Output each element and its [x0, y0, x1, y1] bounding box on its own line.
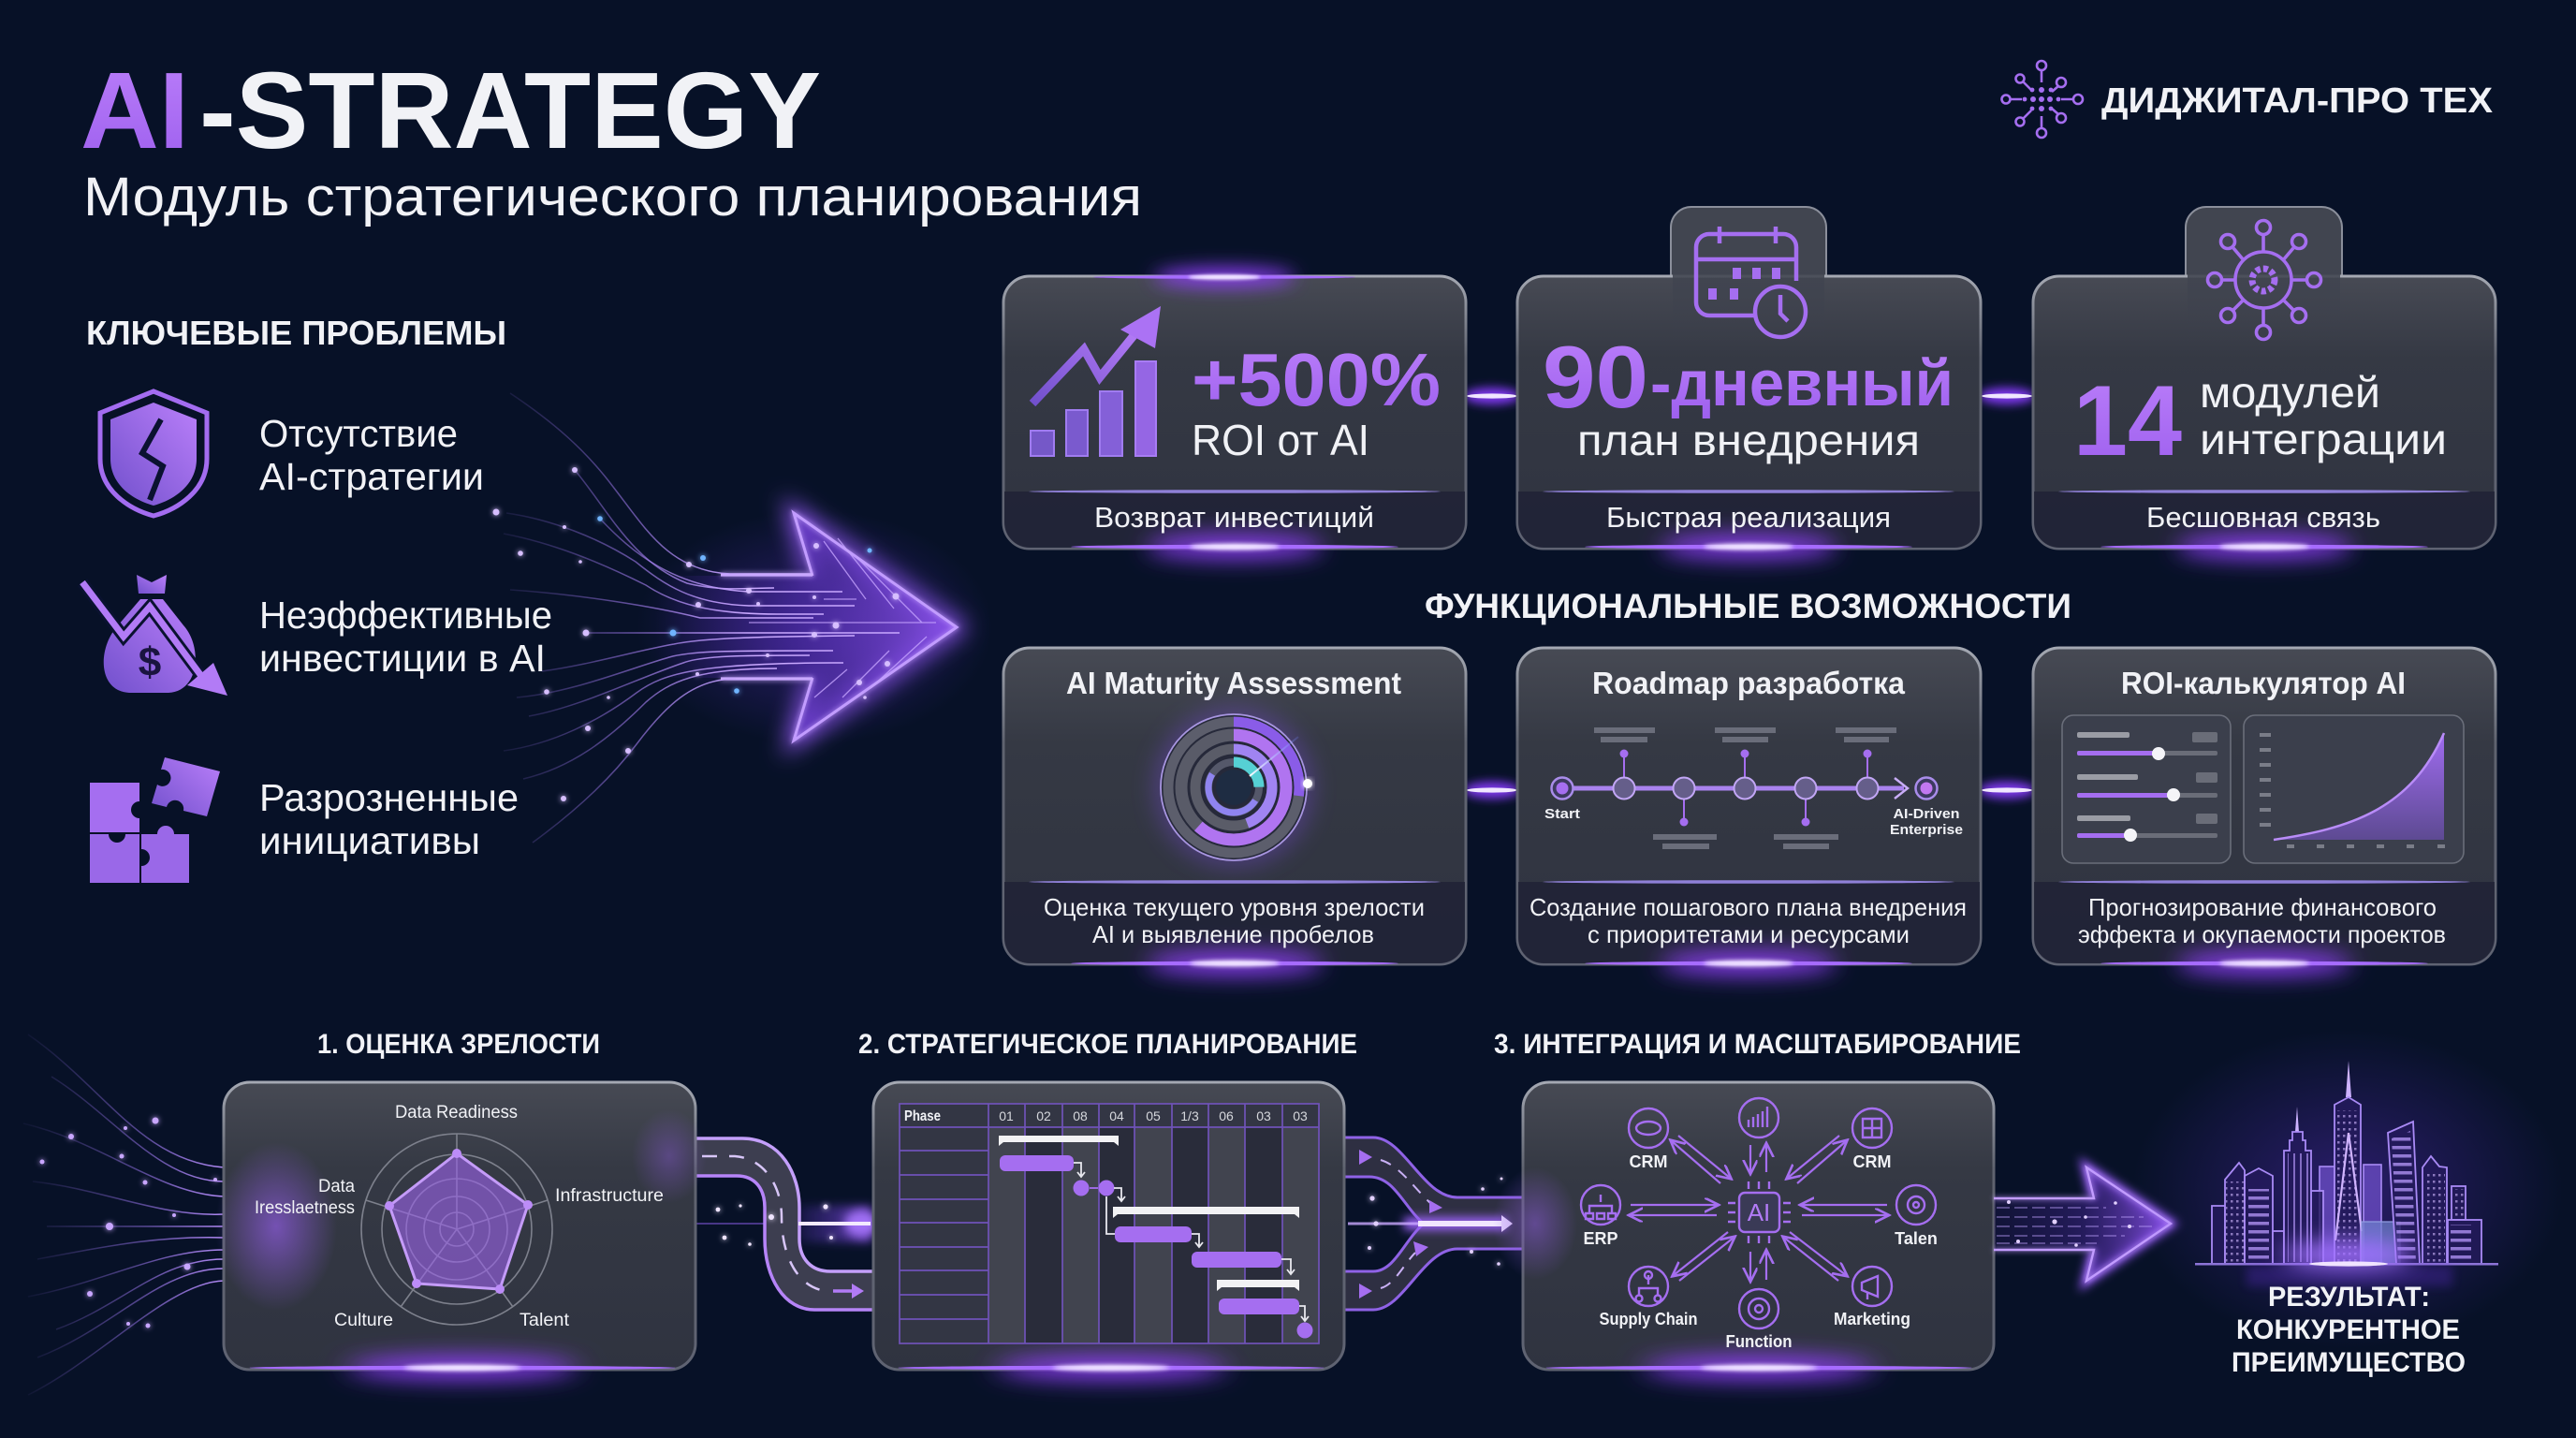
panel: AI Maturity Assessment: [1003, 648, 1466, 976]
labels: systems: CRM: [1629, 1152, 1668, 1171]
footer caption: Возврат инвестиций: [1094, 501, 1374, 534]
connector: second row: [1464, 782, 2035, 799]
icon: network gear: [2207, 221, 2321, 339]
text: problem 3: [259, 776, 519, 862]
chart: Gantt table: 05: [1146, 1108, 1161, 1123]
icon: money bag with down arrow: $: [139, 639, 161, 685]
title: -STRATEGY: [199, 50, 821, 171]
chart: Gantt table: 01: [999, 1108, 1014, 1123]
chart: roadmap timeline: [1544, 727, 1963, 849]
text: problem 2: Неэффективные: [259, 594, 552, 637]
icon: AI chip: [1728, 1181, 1791, 1243]
arrow: to result: [1994, 1167, 2171, 1281]
chart: radar: Iresslaetness: [255, 1198, 355, 1218]
icon: growth chart: [1031, 306, 1161, 456]
text: problem 2: [259, 594, 552, 680]
labels: systems: ERP: [1583, 1229, 1618, 1248]
card description: эффекта и окупаемости проектов: [2078, 920, 2446, 948]
chart: radar: Talent: [520, 1311, 570, 1330]
chart: radar: Data: [318, 1177, 355, 1196]
chart: AI integration hub: [1581, 1098, 1938, 1351]
card description: AI и выявление пробелов: [1092, 920, 1374, 948]
panel: ROI calculator: [2033, 648, 2496, 976]
card description: Создание пошагового плана внедрения: [1530, 893, 1967, 921]
widget: sliders panel: [2062, 715, 2231, 863]
heading: key problems: КЛЮЧЕВЫЕ ПРОБЛЕМЫ: [86, 314, 506, 352]
title: AI: [80, 50, 189, 171]
labels: systems: Talen: [1895, 1229, 1938, 1248]
card title: AI Maturity Assessment: [1066, 666, 1401, 700]
labels: systems: [1583, 1152, 1938, 1351]
metric label: интеграции: [2200, 415, 2447, 463]
panel: key problems: [82, 314, 552, 883]
text: result: ПРЕИМУЩЕСТВО: [2232, 1347, 2466, 1378]
footer caption: Быстрая реализация: [1606, 501, 1891, 534]
text: problem 2: инвестиции в AI: [259, 637, 546, 680]
chart: radar: Data Readiness: [395, 1103, 518, 1123]
chart: roadmap timeline: Enterprise: [1890, 822, 1963, 838]
step heading: 1. ОЦЕНКА ЗРЕЛОСТИ: [317, 1029, 600, 1060]
metric label: [2200, 368, 2447, 463]
panel: 14 modules card: [2033, 207, 2496, 559]
text: problem 1: AI-стратегии: [259, 455, 484, 498]
card description: [1530, 893, 1967, 948]
panel: ROI metric card: [1003, 268, 1466, 559]
text: problem 1: Отсутствие: [259, 412, 458, 455]
card title: Roadmap разработка: [1592, 666, 1906, 700]
panel: step 3 integration: [1493, 1029, 2021, 1380]
labels: systems: CRM: [1853, 1152, 1891, 1171]
chart: Gantt table: [900, 1104, 1319, 1343]
panel: step 2 Gantt: [858, 1029, 1357, 1380]
metric: +500%: +500%: [1192, 338, 1441, 421]
subtitle: Модуль стратегического планирования: [83, 167, 1142, 227]
arrow: big flow arrow into metrics: [492, 393, 992, 843]
card description: Оценка текущего уровня зрелости: [1044, 893, 1425, 921]
metric: 90-дневный: 90: [1543, 328, 1648, 426]
connector: top row: [1464, 388, 2035, 404]
panel: Roadmap: [1517, 648, 1981, 976]
chart: Gantt table: 03: [1293, 1108, 1308, 1123]
labels: systems: Marketing: [1834, 1310, 1910, 1328]
text: result: [2232, 1282, 2466, 1378]
chart: ROI curve: [2244, 715, 2464, 863]
chart: roadmap timeline: AI-Driven: [1893, 806, 1960, 822]
metric: 90-дневный: -дневный: [1650, 346, 1954, 419]
chart: Gantt table: 03: [1256, 1108, 1271, 1123]
card description: [2078, 893, 2446, 948]
step heading: 3. ИНТЕГРАЦИЯ И МАСШТАБИРОВАНИЕ: [1494, 1029, 2021, 1060]
logo text: ДИДЖИТАЛ-ПРО ТЕХ: [2101, 81, 2494, 121]
metric label: ROI от AI: [1192, 416, 1369, 464]
chart: Gantt table: 08: [1073, 1108, 1088, 1123]
connector: step 1 to step 2: [695, 1138, 878, 1310]
labels: systems: Function: [1726, 1332, 1792, 1351]
chart: radar: Culture: [334, 1311, 393, 1330]
chart: Gantt table: 04: [1109, 1108, 1124, 1123]
metric label: модулей: [2200, 368, 2380, 417]
card title: ROI-калькулятор AI: [2121, 666, 2406, 700]
text: problem 1: [259, 412, 484, 498]
icons: systems: [1581, 1098, 1936, 1328]
panel: 90-day plan card: [1517, 207, 1981, 559]
panel: step 1 maturity radar: [215, 1029, 707, 1380]
arrows: hub links: [1631, 1136, 1887, 1281]
text: result: РЕЗУЛЬТАТ:: [2268, 1282, 2430, 1313]
metric: 90-дневный: [1543, 328, 1954, 426]
icon: circuit globe logo: [2001, 61, 2083, 138]
card description: Прогнозирование финансового: [2088, 893, 2437, 921]
chart: radar: [255, 1103, 664, 1330]
illustration: neon city skyline: [2132, 1030, 2563, 1348]
chart: Gantt table: Phase: [904, 1108, 941, 1124]
card description: [1044, 893, 1425, 948]
connector: step 2 to step 3: [1345, 1137, 1523, 1310]
footer caption: Бесшовная связь: [2146, 501, 2380, 534]
chart: Gantt table: 06: [1219, 1108, 1234, 1123]
icon: AI chip: AI: [1748, 1198, 1770, 1226]
card description: с приоритетами и ресурсами: [1588, 920, 1910, 948]
heading: functional capabilities: ФУНКЦИОНАЛЬНЫЕ ВОЗМОЖНОСТИ: [1425, 587, 2071, 625]
metric label: план внедрения: [1577, 416, 1920, 464]
text: problem 3: Разрозненные: [259, 776, 519, 819]
logo: [2001, 61, 2494, 138]
chart: radar: Infrastructure: [555, 1186, 664, 1206]
labels: systems: Supply Chain: [1599, 1310, 1698, 1328]
chart: radial maturity gauge: [1153, 707, 1314, 868]
step heading: 2. СТРАТЕГИЧЕСКОЕ ПЛАНИРОВАНИЕ: [858, 1029, 1357, 1060]
icon: money bag with down arrow: [82, 575, 227, 696]
icon: puzzle pieces: [90, 757, 220, 883]
text: problem 3: инициативы: [259, 819, 480, 862]
icon: broken shield: [100, 391, 207, 516]
text: result: КОНКУРЕНТНОЕ: [2236, 1314, 2460, 1345]
streams: left of step 1: [23, 1034, 224, 1395]
icon: calendar with clock: [1696, 227, 1806, 337]
metric: 14: 14: [2073, 364, 2182, 477]
chart: roadmap timeline: Start: [1544, 806, 1580, 822]
chart: Gantt table: 02: [1036, 1108, 1051, 1123]
chart: Gantt table: 1/3: [1180, 1108, 1199, 1123]
